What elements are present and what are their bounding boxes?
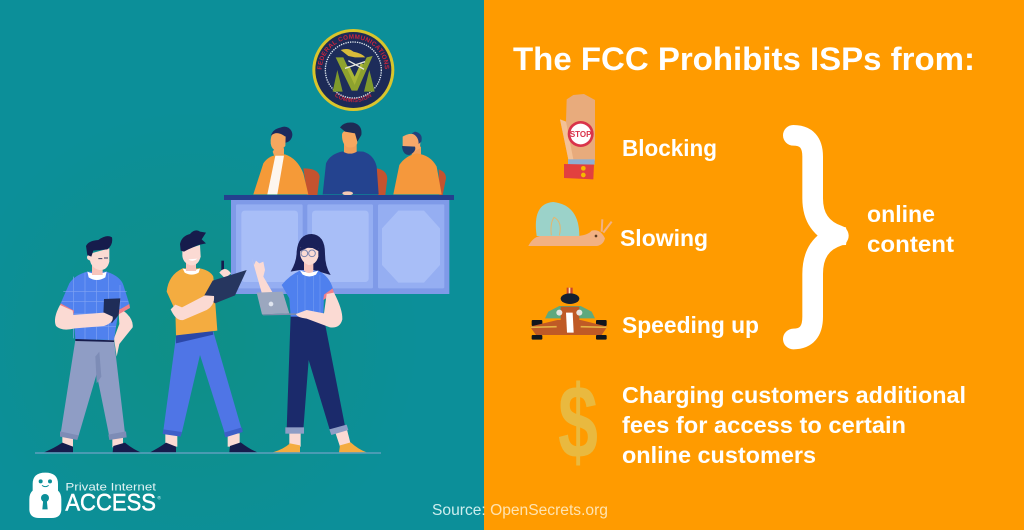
logo text: Private Internet: Private Internet: [65, 482, 156, 494]
hair back: [291, 234, 331, 275]
arm and hand: [171, 295, 214, 320]
label: Slowing: Slowing: [620, 225, 708, 251]
text: charging customers fees: fees for access to certain: [622, 412, 906, 438]
ankles and shoes: [44, 436, 141, 452]
raised arm: [252, 257, 273, 293]
icon: padlock mascot: [29, 473, 61, 518]
chairs behind panel members: [303, 168, 446, 195]
head and hair: [180, 230, 206, 271]
phone: [103, 298, 120, 323]
icon: go kart: [530, 288, 607, 340]
illustration: man with tablet: [150, 230, 257, 452]
icon: stop hand: STOP: [570, 130, 592, 139]
yellow shirt: [167, 268, 217, 335]
panel: orange right background: [484, 0, 1024, 530]
label: Blocking: Blocking: [622, 135, 717, 161]
text: charging customers fees: [622, 382, 966, 468]
shirt collar: [183, 268, 200, 275]
head with glasses: [299, 243, 319, 273]
skin arm at side: [114, 307, 133, 357]
logo: Private Internet Access: [29, 473, 161, 518]
brace grouping the three practices: [793, 135, 847, 339]
icon: snail: [528, 202, 612, 246]
illustration: woman with laptop: [252, 234, 367, 452]
text: charging customers fees: online customers: [622, 442, 816, 468]
label: online content: [867, 201, 954, 257]
forearm and hand: [296, 293, 342, 327]
ground line: [35, 452, 381, 454]
forearm and hand: [55, 305, 113, 330]
icon: FCC seal: COMMISSION: [335, 93, 372, 102]
panel: teal left background: [0, 0, 484, 530]
laptop: [257, 292, 307, 315]
logo text: ACCESS: ACCESS: [65, 490, 156, 517]
blue trousers: [163, 331, 243, 437]
illustration: man with phone: [44, 236, 141, 452]
grey trousers: [60, 340, 127, 440]
title: The FCC Prohibits ISPs from:: [513, 41, 975, 77]
blue striped top: [282, 271, 334, 317]
label: online content: content: [867, 231, 954, 257]
illustration: FCC hearing bench and seal: [224, 29, 454, 294]
icon: FCC seal: FEDERAL COMMUNICATIONS: [317, 34, 390, 70]
person: man commissioner: [323, 123, 379, 195]
desk: panel bench: [224, 195, 454, 294]
ankles and shoes: [150, 433, 257, 452]
icon: stop hand: [560, 94, 595, 179]
label: Speeding up: Speeding up: [622, 312, 759, 338]
navy trousers: [285, 315, 348, 435]
person: woman commissioner: [253, 127, 308, 194]
icon: dollar sign: $: [558, 365, 598, 481]
icon: FCC seal: [312, 29, 394, 111]
source credit: Source: OpenSecrets.org: [432, 502, 608, 519]
ankles and yellow shoes: [273, 428, 367, 452]
text: charging customers fees: Charging customers additional: [622, 382, 966, 408]
person: bearded commissioner: [393, 132, 442, 194]
logo registered mark: ®: [157, 494, 161, 501]
tablet and pen: [204, 261, 247, 303]
head and hair: [86, 236, 112, 275]
checked blue shirt: [59, 272, 130, 342]
label: online content: online: [867, 201, 935, 227]
